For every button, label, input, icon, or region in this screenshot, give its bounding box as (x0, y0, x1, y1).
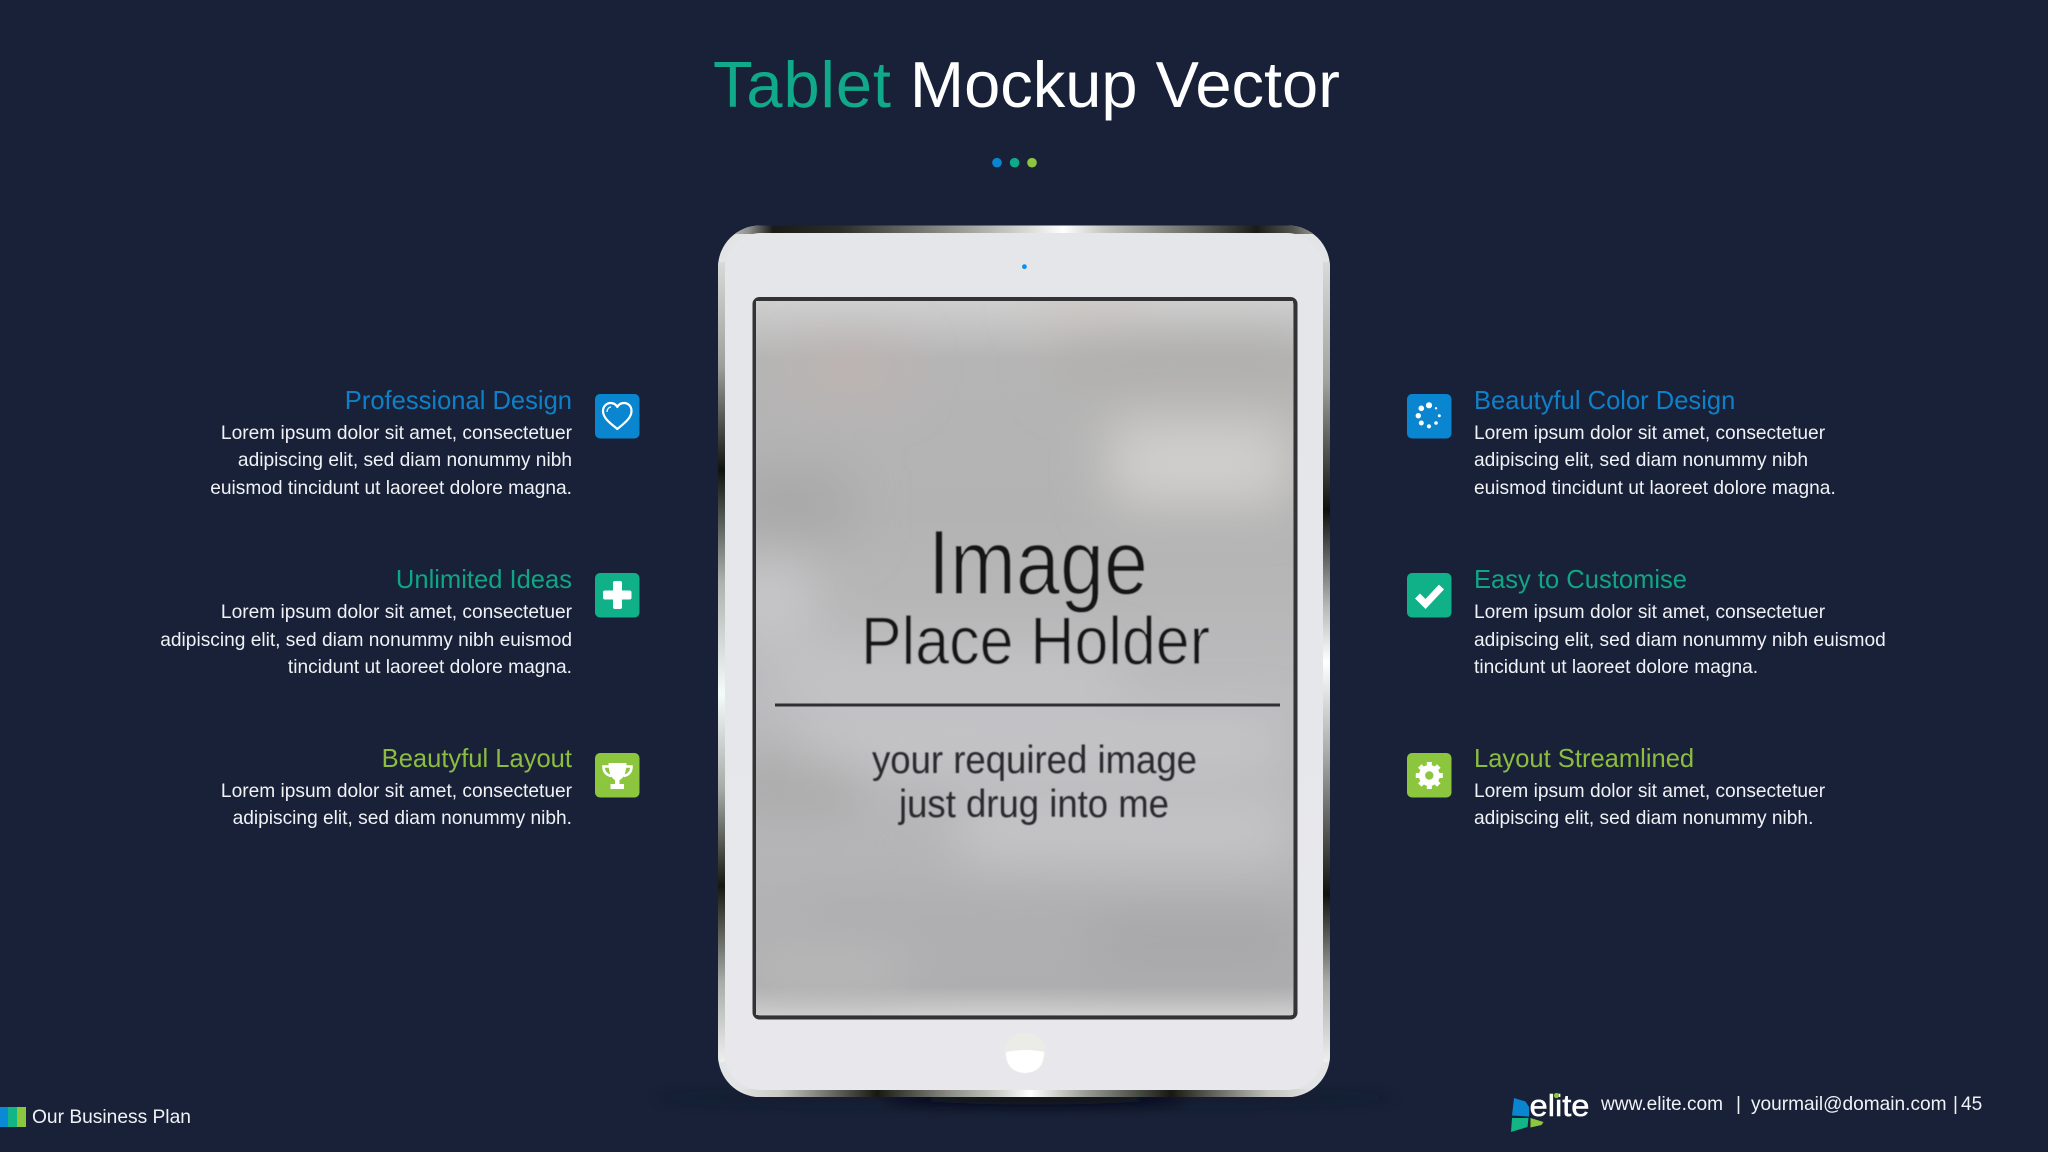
body text: tincidunt ut laoreet dolore magna. (288, 657, 572, 678)
feature: Beautyful Color Design (1407, 386, 1836, 499)
feature: Professional Design (210, 386, 640, 499)
title dots (992, 158, 1037, 168)
title: Tablet Mockup Vector (713, 48, 1340, 121)
body text: adipiscing elit, sed diam nonummy nibh euismod (160, 630, 572, 651)
placeholder text: your required image (872, 739, 1197, 782)
heading: Layout Streamlined (1474, 745, 1694, 773)
screen frame (754, 299, 1296, 1018)
body text (210, 423, 572, 499)
body text (160, 602, 572, 678)
tablet shadow (655, 1091, 1395, 1105)
heading: Beautyful Color Design (1474, 386, 1735, 414)
body text: Lorem ipsum dolor sit amet, consectetuer (1474, 602, 1825, 623)
tablet metallic edge (718, 225, 1330, 1098)
icon: heart (595, 394, 640, 438)
icon: trophy (595, 753, 640, 798)
footer: business plan label (0, 1106, 191, 1128)
heading: Unlimited Ideas (396, 566, 572, 594)
feature: Layout Streamlined (1407, 745, 1825, 829)
footer: logo (1511, 1088, 1590, 1132)
placeholder divider (775, 704, 1280, 706)
body text: adipiscing elit, sed diam nonummy nibh. (1474, 808, 1813, 829)
placeholder text (861, 512, 1210, 826)
placeholder text: Place Holder (861, 603, 1210, 679)
feature: Beautyful Layout (221, 745, 640, 829)
body text: adipiscing elit, sed diam nonummy nibh euismod (1474, 630, 1886, 651)
icon: gear (1407, 753, 1452, 798)
body text: Lorem ipsum dolor sit amet, consectetuer (1474, 781, 1825, 802)
footer: logo: elite (1530, 1088, 1590, 1123)
tablet mockup (718, 226, 1330, 1112)
body text: Lorem ipsum dolor sit amet, consectetuer (1474, 423, 1825, 444)
body text: adipiscing elit, sed diam nonummy nibh. (233, 808, 572, 829)
body text (221, 781, 572, 829)
icon: plus (595, 573, 640, 618)
body text (1474, 423, 1836, 499)
heading: Easy to Customise (1474, 566, 1687, 594)
body text: euismod tincidunt ut laoreet dolore magna. (210, 478, 572, 499)
heading: Professional Design (345, 386, 572, 414)
icon: check (1407, 573, 1452, 618)
separator: | (1953, 1094, 1958, 1115)
body text: Lorem ipsum dolor sit amet, consectetuer (221, 781, 572, 802)
footer: contact details (1601, 1094, 1982, 1115)
body text: adipiscing elit, sed diam nonummy nibh (238, 450, 572, 471)
body text: Lorem ipsum dolor sit amet, consectetuer (221, 423, 572, 444)
colour bar (0, 1107, 26, 1127)
feature: Easy to Customise (1407, 566, 1886, 678)
body text: Lorem ipsum dolor sit amet, consectetuer (221, 602, 572, 623)
body text: euismod tincidunt ut laoreet dolore magna. (1474, 478, 1836, 499)
email: yourmail@domain.com (1751, 1094, 1947, 1115)
separator: | (1736, 1094, 1741, 1115)
tablet body (725, 233, 1323, 1090)
feature: Unlimited Ideas (160, 566, 640, 678)
placeholder text: Image (928, 512, 1148, 614)
label text: Our Business Plan (32, 1106, 191, 1128)
camera (1022, 264, 1027, 269)
placeholder text: just drug into me (898, 783, 1169, 826)
icon: spinner (1407, 394, 1452, 438)
body text: tincidunt ut laoreet dolore magna. (1474, 657, 1758, 678)
body text (1474, 781, 1825, 829)
heading: Beautyful Layout (382, 745, 572, 773)
body text (1474, 602, 1886, 678)
placeholder image (730, 290, 1300, 1015)
body text: adipiscing elit, sed diam nonummy nibh (1474, 450, 1808, 471)
home button (1004, 1032, 1046, 1074)
page number: 45 (1961, 1094, 1982, 1115)
website: www.elite.com (1601, 1094, 1723, 1115)
